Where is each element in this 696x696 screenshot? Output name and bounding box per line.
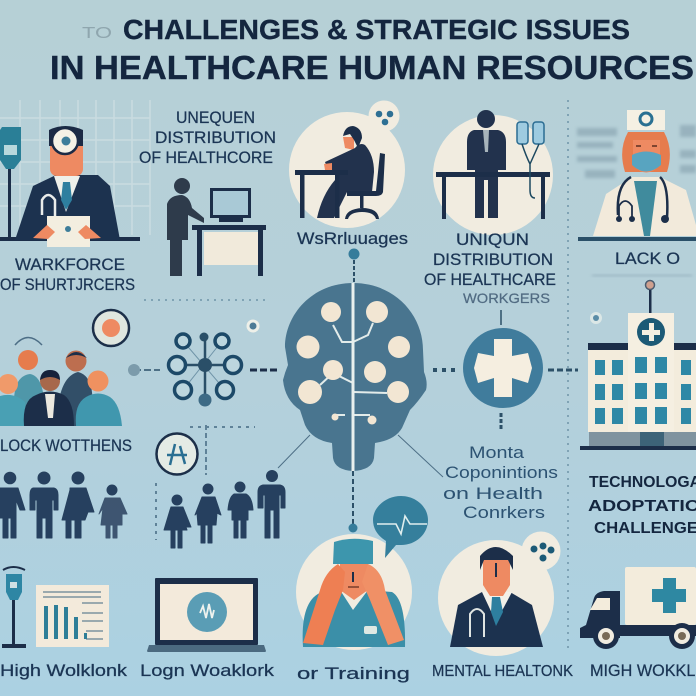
- label: high workload left: High Wolklonk: [0, 662, 128, 680]
- panel: doctor with thought bubble: [438, 532, 560, 656]
- label: mental conditions: on Health: [443, 485, 543, 503]
- label: workforce: [0, 256, 135, 294]
- label: login workload: Logn Woaklork: [140, 662, 275, 680]
- label: lack of workers: LOCK WOTTHENS: [0, 437, 132, 455]
- label: unequal distribution 2: DISTRIBUTION: [433, 251, 553, 269]
- brain nodes: [296, 301, 410, 424]
- label: technology adoption: [588, 474, 696, 537]
- people row right: [164, 470, 285, 548]
- panel: hospital: [580, 280, 696, 450]
- speech bubble with heartbeat: [373, 496, 428, 558]
- label: lack of: [592, 250, 692, 277]
- central brain head: [283, 283, 427, 471]
- seated figure: [295, 126, 385, 219]
- icon: network diagram: [128, 332, 277, 406]
- people row left: [0, 472, 127, 538]
- title: CHALLENGES & STRATEGIC ISSUES: [123, 14, 630, 45]
- icon: person at computer: [167, 178, 266, 276]
- label: unequal distribution 1: DISTRIBUTION: [155, 129, 276, 147]
- label: unequal distribution 1: [139, 109, 276, 167]
- label: mental conditions: Coponintions: [445, 464, 558, 482]
- label: poor training: or Training: [297, 665, 410, 683]
- panel: group of workers: [0, 350, 122, 426]
- icon: thought bubble: [368, 100, 400, 132]
- label: unequal distribution 1: OF HEALTHCORE: [139, 149, 273, 167]
- title: IN HEALTHCARE HUMAN RESOURCES: [50, 49, 694, 86]
- icon: laptop: [147, 578, 266, 652]
- connectors: [156, 254, 578, 540]
- label: technology adoption: ADOPTATIO: [588, 498, 696, 515]
- panel: person at table with iv: [433, 110, 553, 235]
- panel: nurse: [577, 110, 696, 241]
- windows: [595, 357, 691, 424]
- icon: iv pole: [2, 567, 26, 648]
- label: lack of: LACK O: [615, 250, 680, 268]
- label: workforce: OF SHURTJRCERS: [0, 276, 135, 294]
- thought bubble: [522, 532, 560, 576]
- panel: stressed nurse: [296, 496, 428, 650]
- icon: medical cross: [463, 328, 543, 408]
- label: mental conditions: Conrkers: [463, 504, 545, 522]
- label: mental conditions: [443, 444, 558, 522]
- label: unequal distribution 1: UNEQUEN: [176, 109, 255, 127]
- label: unequal distribution 2: OF HEALTHCARE: [424, 271, 556, 289]
- panel: worker at desk: [289, 100, 405, 228]
- icon: small target: [15, 310, 260, 346]
- title: [50, 14, 694, 86]
- label: unequal distribution 2: UNIQUN: [456, 231, 529, 249]
- chart: workload bars: [36, 585, 109, 647]
- label: unequal distribution 2: WORKGERS: [463, 290, 550, 306]
- icon: table badge: [156, 434, 198, 474]
- panel: workforce doctor: [0, 126, 140, 247]
- label: technology adoption: CHALLENGE: [594, 520, 696, 537]
- icon: ambulance: [580, 567, 696, 649]
- label: wages: WsRrluuages: [297, 230, 408, 248]
- title: TO: [82, 25, 112, 42]
- label: mental health: MENTAL HEALTONK: [432, 663, 573, 680]
- label: mental conditions: Monta: [469, 444, 525, 462]
- label: workforce: WARKFORCE: [15, 256, 125, 274]
- icon: iv bags: [517, 122, 544, 198]
- icon: iv bag: [0, 127, 21, 239]
- label: unequal distribution 2: [424, 231, 556, 306]
